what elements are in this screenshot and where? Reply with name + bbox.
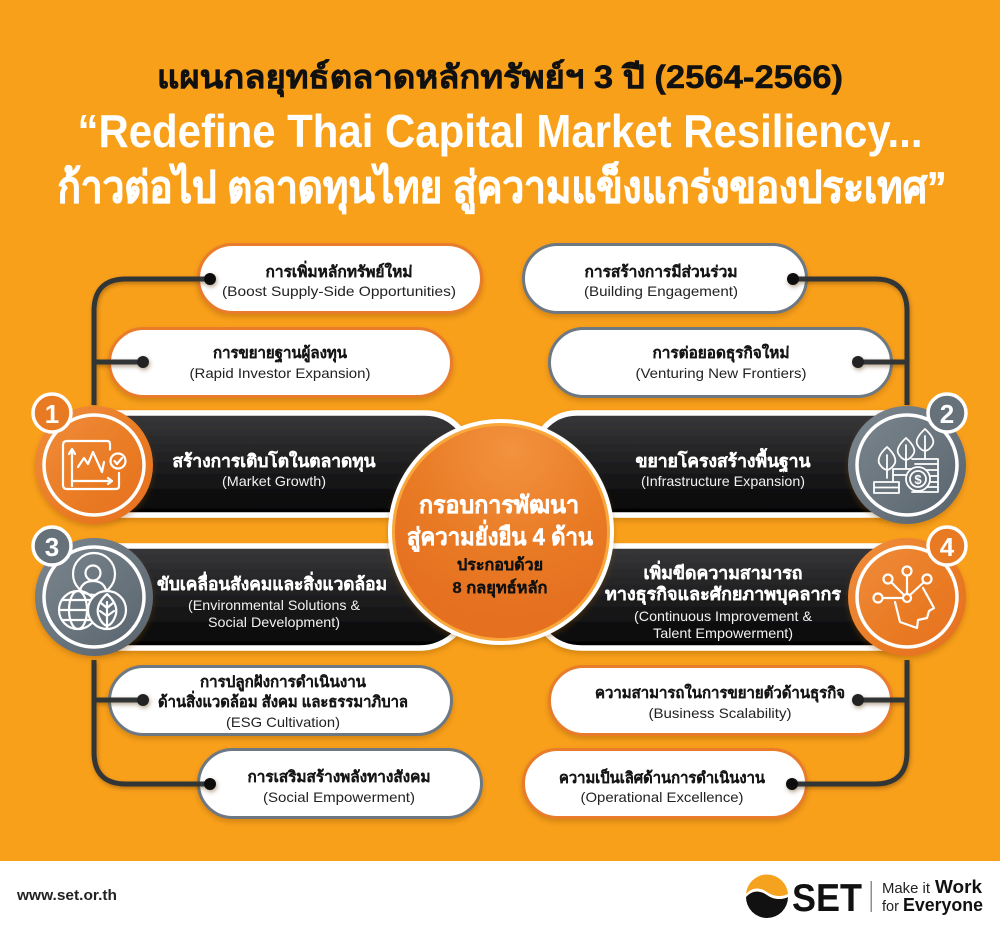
badge 1: 1 bbox=[45, 399, 59, 429]
pill: Rapid Investor Expansion: (Rapid Investor Expansion) bbox=[190, 365, 370, 381]
bar 2: Infrastructure Expansion: (Infrastructure Expansion) bbox=[641, 473, 805, 489]
bar 1: Market Growth: สร้างการเติบโตในตลาดทุน bbox=[172, 450, 376, 472]
pill: Social Empowerment: การเสริมสร้างพลังทางสังคม bbox=[248, 768, 430, 786]
pill: Rapid Investor Expansion bbox=[110, 328, 452, 396]
pill: Boost Supply-Side Opportunities: (Boost Supply-Side Opportunities) bbox=[222, 283, 456, 299]
badge 2 bbox=[928, 394, 966, 432]
pill: Boost Supply-Side Opportunities bbox=[198, 244, 482, 312]
slogan: for bbox=[882, 899, 899, 915]
badge 4: 4 bbox=[940, 532, 955, 562]
title: “Redefine Thai Capital Market Resiliency... bbox=[78, 105, 922, 157]
badge 3: 3 bbox=[45, 532, 59, 562]
icon: chart with check bbox=[63, 441, 126, 489]
pill: Boost Supply-Side Opportunities: การเพิ่มหลักทรัพย์ใหม่ bbox=[266, 260, 412, 281]
slogan bbox=[870, 876, 983, 915]
pill: ESG Cultivation: (ESG Cultivation) bbox=[226, 714, 340, 730]
pill: ESG Cultivation bbox=[110, 666, 452, 734]
footer bbox=[0, 861, 1000, 930]
connector: top left bbox=[94, 273, 216, 405]
bar 4: Continuous Improvement bbox=[530, 546, 905, 648]
icon: person globe leaf bbox=[59, 553, 126, 629]
bar 3: Environmental Solutions: Social Development) bbox=[208, 614, 340, 630]
bar 4: Continuous Improvement: Talent Empowerment) bbox=[653, 625, 793, 641]
central circle: 8 กลยุทธ์หลัก bbox=[452, 578, 548, 598]
bar 2: Infrastructure Expansion bbox=[530, 413, 905, 515]
central circle: กรอบการพัฒนา bbox=[419, 492, 579, 519]
icon circle 2: coins and plants bbox=[848, 406, 966, 524]
bar 4: Continuous Improvement: ทางธุรกิจและศักยภาพบุคลากร bbox=[605, 584, 842, 605]
title: แผนกลยุทธ์ตลาดหลักทรัพย์ฯ 3 ปี (2564-2566) bbox=[157, 59, 843, 98]
connector: top right bbox=[787, 273, 907, 405]
slogan: Work bbox=[935, 876, 983, 897]
pill: Business Scalability bbox=[550, 666, 892, 734]
badge 1 bbox=[33, 394, 71, 432]
SET logo: SET bbox=[792, 877, 862, 920]
badge 2: 2 bbox=[940, 399, 954, 429]
pill: Venturing New Frontiers: การต่อยอดธุรกิจใหม่ bbox=[652, 343, 790, 363]
pill: Venturing New Frontiers: (Venturing New Frontiers) bbox=[636, 365, 806, 381]
bar 2: Infrastructure Expansion: ขยายโครงสร้างพื้นฐาน bbox=[636, 448, 811, 473]
pill: Social Empowerment bbox=[198, 750, 482, 818]
central circle: ประกอบด้วย bbox=[457, 556, 543, 574]
bar 4: Continuous Improvement: (Continuous Improvement & bbox=[634, 608, 813, 624]
pill: Building Engagement: (Building Engagement) bbox=[584, 283, 738, 299]
pill: Rapid Investor Expansion: การขยายฐานผู้ลงทุน bbox=[213, 344, 347, 364]
central circle: สู่ความยั่งยืน 4 ด้าน bbox=[407, 519, 594, 552]
icon: head network bbox=[874, 566, 934, 628]
bar 1: Market Growth: (Market Growth) bbox=[222, 473, 326, 489]
pill: ESG Cultivation: ด้านสิ่งแวดล้อม สังคม และธรรมาภิบาล bbox=[158, 690, 408, 711]
connector: bottom right bbox=[786, 660, 907, 790]
pill: Building Engagement: การสร้างการมีส่วนร่วม bbox=[584, 263, 738, 281]
pill: Operational Excellence bbox=[524, 750, 806, 818]
badge 4 bbox=[928, 527, 966, 565]
icon circle 3: people, globe and leaf bbox=[35, 538, 153, 656]
slogan: Make it bbox=[882, 881, 930, 897]
bar 1: Market Growth bbox=[95, 413, 470, 515]
icon: coins and leaves: $ bbox=[914, 472, 922, 487]
pill: Operational Excellence: ความเป็นเลิศด้านการดำเนินงาน bbox=[559, 767, 765, 787]
connector: bottom left bbox=[94, 660, 216, 790]
website url: www.set.or.th bbox=[16, 888, 117, 904]
pill: Business Scalability: ความสามารถในการขยายตัวด้านธุรกิจ bbox=[595, 683, 845, 703]
pill: Operational Excellence: (Operational Excellence) bbox=[580, 789, 744, 805]
SET logo bbox=[746, 874, 862, 920]
title bbox=[58, 59, 946, 215]
icon circle 1: market chart bbox=[35, 406, 153, 524]
pill: Venturing New Frontiers bbox=[550, 328, 892, 396]
bar 3: Environmental Solutions bbox=[95, 546, 470, 648]
badge 3 bbox=[33, 527, 71, 565]
slogan: Everyone bbox=[903, 894, 983, 915]
bar 3: Environmental Solutions: (Environmental Solutions & bbox=[188, 597, 361, 613]
bar 4: Continuous Improvement: เพิ่มขีดความสามารถ bbox=[644, 560, 802, 583]
pill: Social Empowerment: (Social Empowerment) bbox=[263, 789, 415, 805]
bar 3: Environmental Solutions: ขับเคลื่อนสังคมและสิ่งแวดล้อม bbox=[157, 571, 387, 594]
pill: Building Engagement bbox=[524, 244, 806, 312]
icon circle 4: head with network bbox=[848, 538, 966, 656]
pill: Business Scalability: (Business Scalability) bbox=[648, 705, 792, 721]
central circle bbox=[388, 419, 614, 645]
pill: ESG Cultivation: การปลูกฝังการดำเนินงาน bbox=[200, 673, 366, 693]
